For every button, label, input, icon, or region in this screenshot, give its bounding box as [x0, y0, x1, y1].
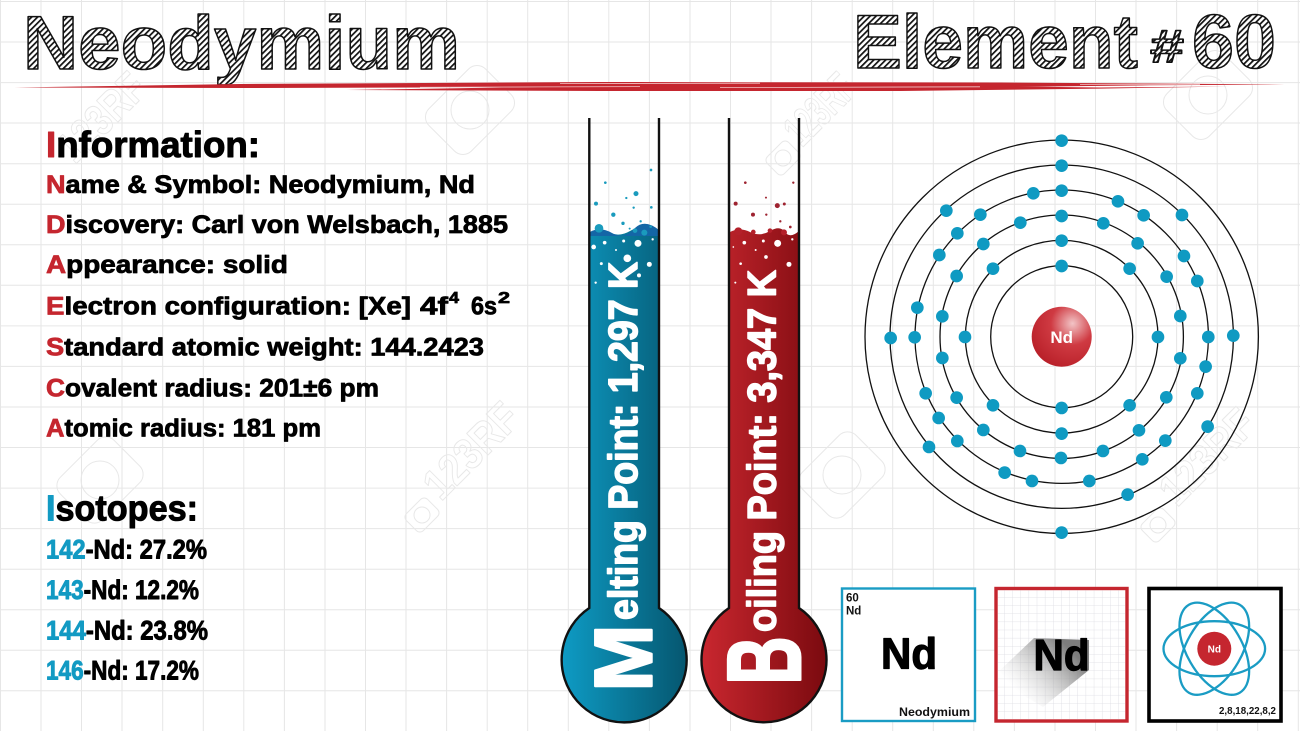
shell rings: [865, 140, 1258, 533]
information panel: [46, 124, 510, 442]
label: Melting Point: M: [579, 624, 670, 692]
red brush underline: [14, 82, 1285, 91]
card: periodic table tile: 60: [846, 592, 859, 604]
electrons: [884, 134, 1240, 539]
watermark marks: 123RF: [47, 63, 156, 172]
card: atom icon: [1149, 588, 1281, 721]
label: Boiling Point: [707, 270, 823, 684]
title: Element #60: #: [1150, 20, 1184, 72]
atom diagram: electron shells: [865, 134, 1258, 539]
isotopes panel: [46, 488, 208, 686]
electron configuration: [46, 290, 510, 320]
bubbles: [732, 181, 794, 284]
card: atom icon: 2,8,18,22,8,2: [1219, 705, 1276, 717]
card: periodic table tile: Neodymium: [899, 705, 970, 719]
nucleus: Nd: [1050, 328, 1073, 347]
watermark marks: 123RF: [774, 64, 866, 155]
surface band: [590, 224, 659, 236]
card: periodic table tile: Nd: [846, 606, 861, 618]
isotope 146: 146-Nd: 17.2%: [46, 656, 199, 686]
boiling point thermometer: [702, 118, 827, 723]
title: Element #60: Element: [853, 0, 1138, 85]
watermark marks: [47, 46, 1265, 544]
label: Melting Point: elting Point: 1,297 K: [600, 262, 646, 620]
electron configuration: Electron configuration: [Xe]: [46, 292, 411, 320]
covalent radius: Covalent radius: 201±6 pm: [46, 374, 379, 402]
tube outline: [562, 118, 687, 722]
isotope 144: 144-Nd: 23.8%: [46, 616, 208, 646]
heading: Isotopes: Isotopes:: [46, 488, 198, 528]
title: Element #60: 60: [1192, 0, 1276, 85]
title: Element #60: [853, 0, 1276, 85]
liquid fill: [702, 228, 827, 723]
bubbles: [591, 169, 654, 284]
isotope 143: 143-Nd: 12.2%: [46, 575, 199, 605]
label: Boiling Point: B: [707, 636, 823, 684]
electron configuration: 2: [498, 290, 510, 307]
tube outline: [702, 118, 827, 722]
card: long shadow symbol: Nd: [1034, 631, 1090, 680]
electron configuration: 6s: [471, 292, 497, 320]
electron configuration: 4f: [420, 292, 449, 320]
label: Boiling Point: oiling Point: 3,347 K: [740, 270, 784, 632]
card: periodic table tile: [842, 588, 975, 721]
atomic weight: Standard atomic weight: 144.2423: [46, 334, 484, 362]
atomic radius: Atomic radius: 181 pm: [46, 414, 321, 442]
label: Melting Point: [579, 262, 670, 692]
isotope 142: 142-Nd: 27.2%: [46, 534, 207, 564]
watermark marks: 123RF: [413, 393, 529, 509]
card: long shadow symbol: [996, 588, 1127, 721]
title: Neodymium: Neodymium: [23, 1, 460, 86]
melting point thermometer: [562, 118, 687, 723]
card: atom icon: Nd: [1208, 644, 1221, 656]
card: periodic table tile: Nd: [881, 630, 937, 678]
liquid fill: [562, 228, 687, 723]
heading: Information: Information:: [46, 124, 260, 165]
nucleus: [1032, 307, 1092, 367]
watermark marks: 123RF: [1149, 399, 1265, 515]
appearance: Appearance: solid: [46, 251, 288, 279]
name and symbol: Name & Symbol: Neodymium, Nd: [46, 171, 475, 199]
discovery: Discovery: Carl von Welsbach, 1885: [46, 211, 508, 239]
electron configuration: 4: [449, 290, 459, 307]
